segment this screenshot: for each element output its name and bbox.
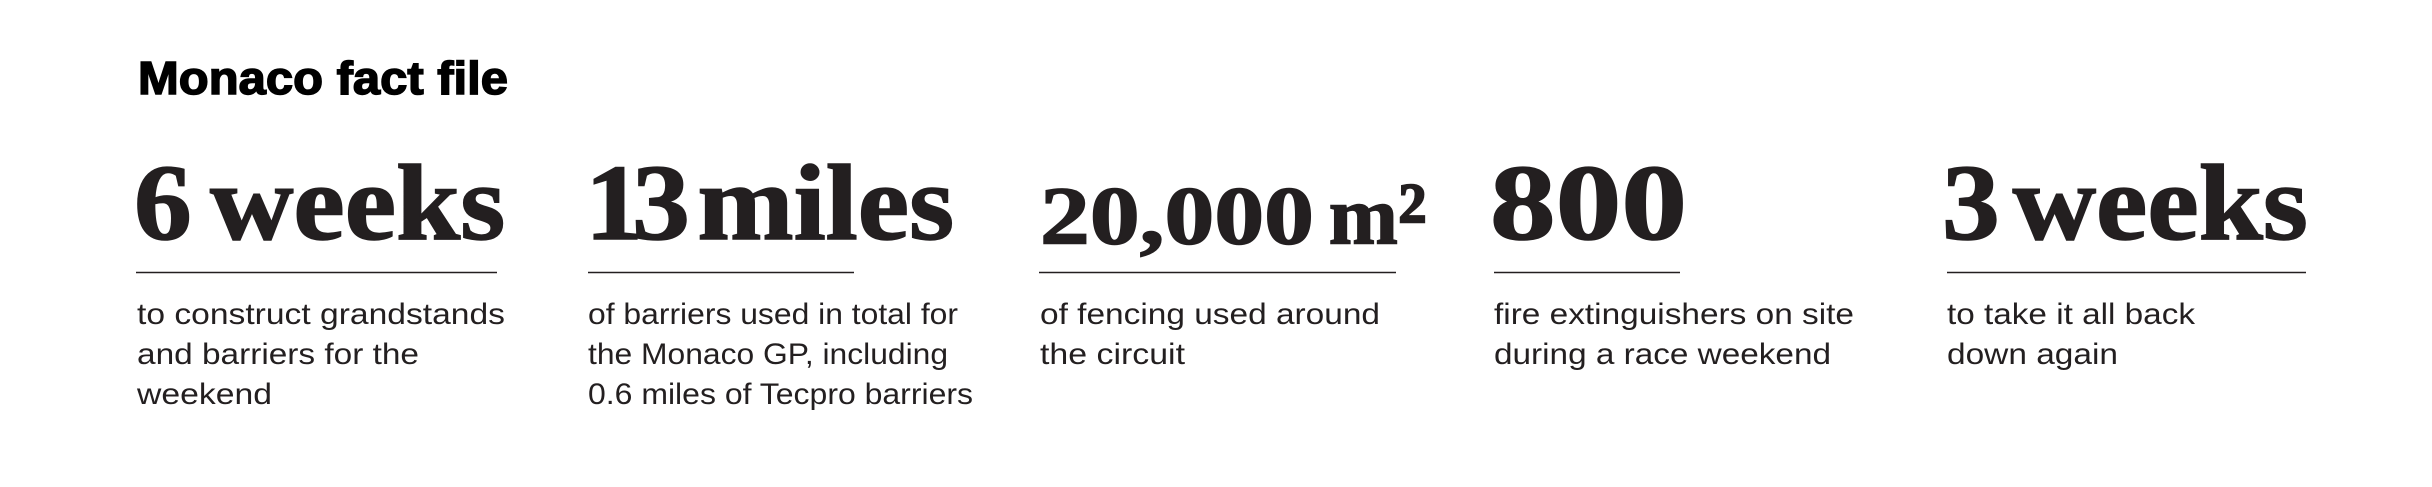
title: Monaco fact file — [138, 52, 508, 104]
big number: 800: 800 — [1490, 144, 1687, 263]
description: fire extinguishers: during a race weekend — [1494, 338, 1831, 371]
panel: 13 miles — [585, 143, 973, 411]
panel: 20,000 m2 — [1039, 162, 1427, 371]
description: barriers: 0.6 miles of Tecpro barriers — [588, 378, 973, 411]
description: grandstands: and barriers for the — [137, 338, 419, 371]
description: barriers: of barriers used in total for — [588, 298, 958, 331]
description: barriers — [588, 298, 973, 411]
big number: 13 miles: 13 miles — [585, 143, 954, 263]
description: grandstands: weekend — [136, 378, 272, 411]
description: fire extinguishers — [1494, 298, 1854, 371]
description: fencing: the circuit — [1040, 338, 1186, 371]
description: barriers: the Monaco GP, including — [588, 338, 948, 371]
big number: 6 weeks: 6 weeks — [134, 143, 505, 263]
description: take down: down again — [1947, 338, 2118, 371]
description: take down: to take it all back — [1947, 298, 2196, 331]
description: grandstands — [136, 298, 505, 411]
big number: 3 weeks: 3 weeks — [1942, 143, 2308, 263]
description: take down — [1947, 298, 2196, 371]
big number: 20,000 m2: 20,000 m — [1040, 170, 1398, 262]
panel: 3 weeks — [1942, 143, 2308, 371]
description: grandstands: to construct grandstands — [137, 298, 505, 331]
panel: 800 — [1490, 144, 1854, 371]
description: fire extinguishers: fire extinguishers on site — [1494, 298, 1854, 331]
big number: 20,000 m2: ² — [1398, 162, 1427, 268]
description: fencing — [1040, 298, 1380, 371]
panel: 6 weeks — [134, 143, 505, 411]
description: fencing: of fencing used around — [1040, 298, 1380, 331]
